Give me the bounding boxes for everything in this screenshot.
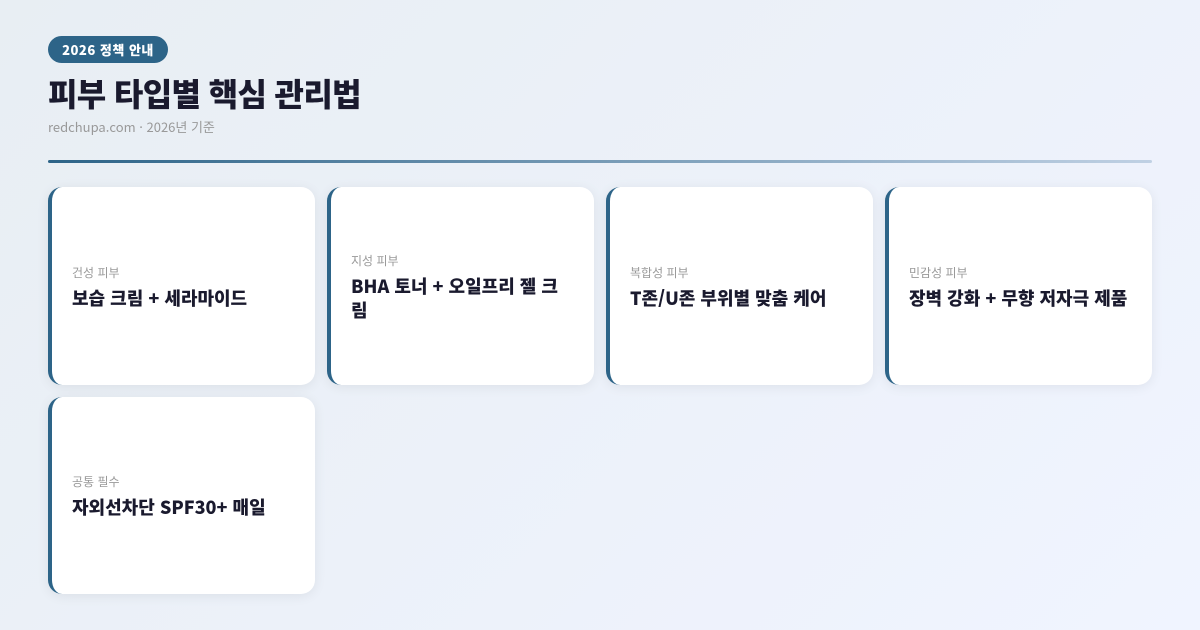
panel: common essential	[48, 396, 315, 594]
subtitle: redchupa.com · 2026년 기준	[48, 117, 215, 136]
text: sensitive skin care: 장벽 강화 + 무향 저자극 제품	[909, 285, 1127, 311]
text: combination skin care: T존/U존 부위별 맞춤 케어	[630, 285, 826, 311]
panel: combination skin	[606, 187, 873, 384]
panel: oily skin	[327, 187, 594, 384]
text: dry skin care: 보습 크림 + 세라마이드	[72, 285, 247, 311]
panel: dry skin	[48, 187, 315, 384]
badge	[48, 36, 168, 63]
title: 피부 타입별 핵심 관리법	[48, 70, 361, 116]
label: common essential: 공통 필수	[72, 473, 120, 490]
label: sensitive skin: 민감성 피부	[909, 264, 968, 281]
text: oily skin care: BHA 토너 + 오일프리 젤 크림	[351, 273, 558, 323]
text: common essential care: 자외선차단 SPF30+ 매일	[72, 494, 266, 520]
panel: sensitive skin	[885, 187, 1152, 384]
label: oily skin: 지성 피부	[351, 252, 399, 269]
badge: 2026 정책 안내	[62, 40, 154, 59]
label: dry skin: 건성 피부	[72, 264, 120, 281]
label: combination skin: 복합성 피부	[630, 264, 689, 281]
